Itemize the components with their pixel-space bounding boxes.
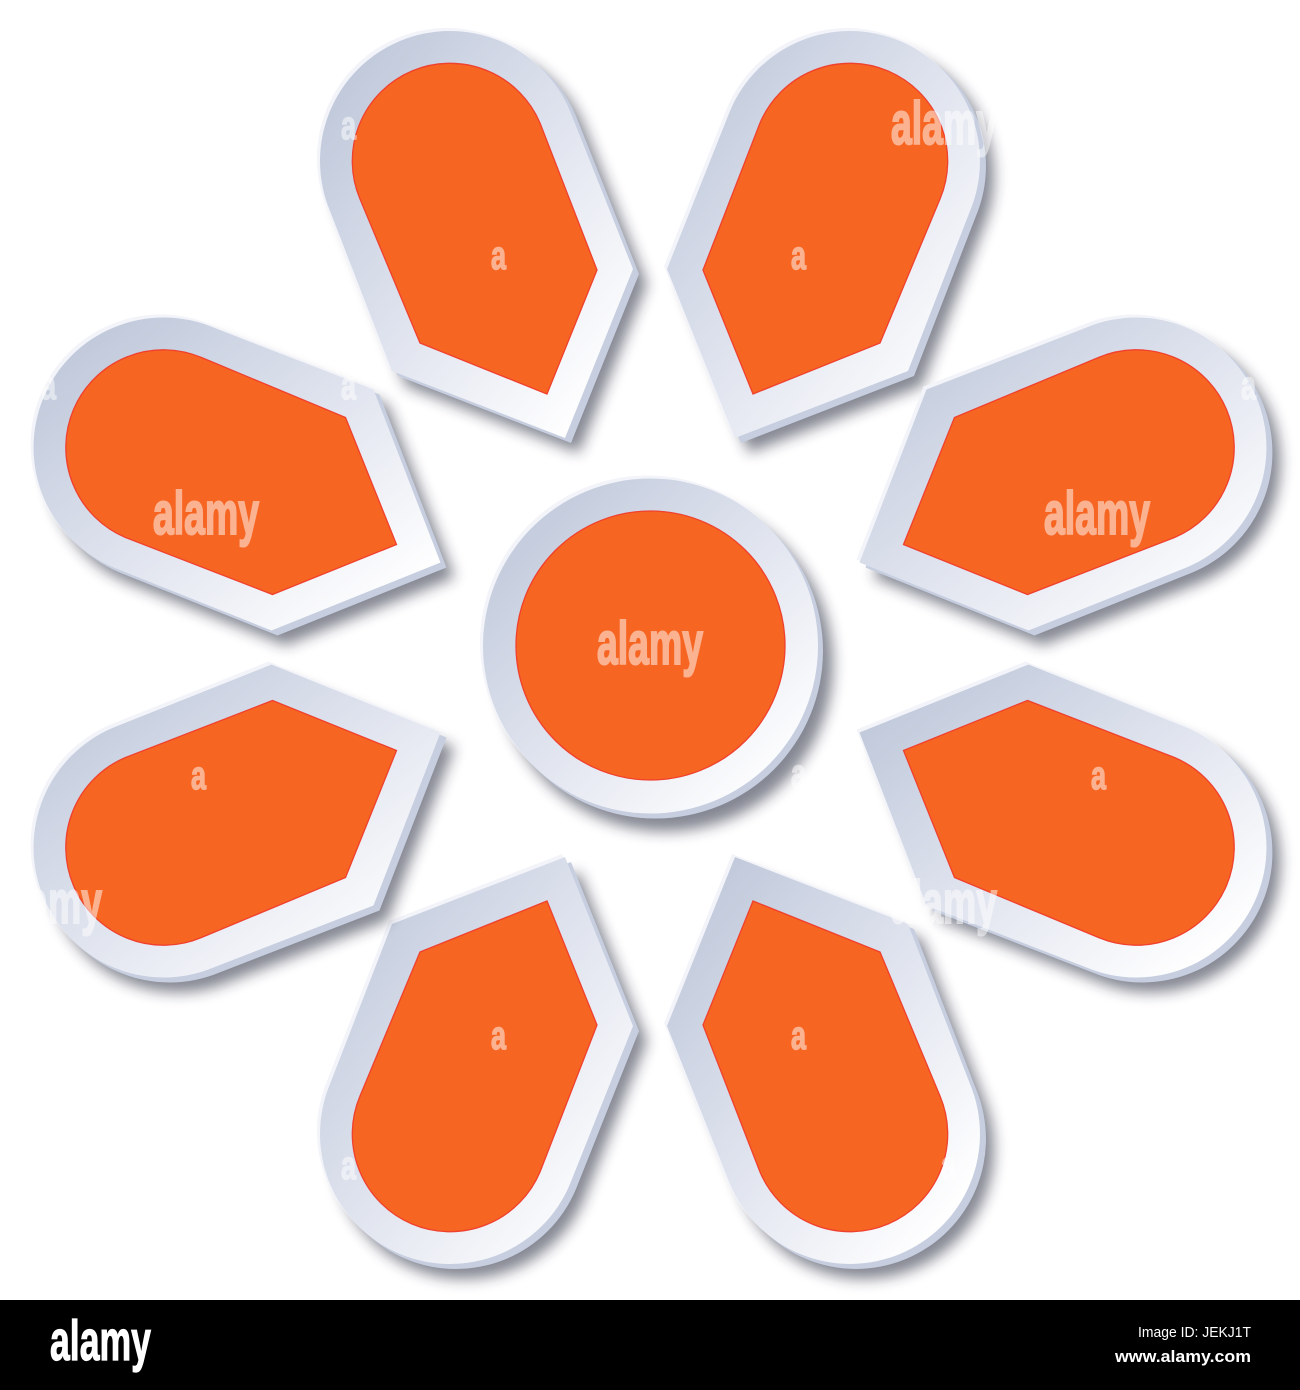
watermarks: a xyxy=(941,1144,957,1188)
watermarks: alamy xyxy=(153,480,259,547)
footer bar xyxy=(0,1300,1300,1390)
watermarks: alamy xyxy=(891,869,997,936)
watermarks: alamy xyxy=(597,610,703,677)
watermarks: a xyxy=(341,1144,357,1188)
watermarks: a xyxy=(341,364,357,408)
image id: Image ID: JEKJ1T xyxy=(1138,1324,1251,1341)
watermarks: alamy xyxy=(1044,480,1150,547)
petal: left lower xyxy=(31,662,455,992)
watermarks: a xyxy=(491,1014,507,1058)
petal: top left xyxy=(317,28,647,453)
petal: bottom left xyxy=(317,854,647,1279)
center circle xyxy=(480,476,833,832)
watermarks xyxy=(0,90,1257,1188)
petal: bottom right xyxy=(664,854,994,1279)
watermarks: a xyxy=(791,752,807,796)
watermarks: a xyxy=(1091,754,1107,798)
watermarks: a xyxy=(1241,364,1257,408)
petal: top right xyxy=(664,28,994,453)
watermarks: a xyxy=(341,104,357,148)
watermarks: a xyxy=(791,234,807,278)
watermarks: a xyxy=(41,364,57,408)
watermarks: a xyxy=(791,1014,807,1058)
watermarks: a xyxy=(191,754,207,798)
watermarks: a xyxy=(491,234,507,278)
watermarks: alamy xyxy=(0,869,102,936)
petal: right upper xyxy=(856,315,1280,646)
website: www.alamy.com xyxy=(1114,1347,1251,1366)
petal: left upper xyxy=(31,315,454,646)
watermarks: alamy xyxy=(891,90,997,157)
petal: right lower xyxy=(856,662,1280,992)
footer logo: alamy xyxy=(50,1309,151,1373)
